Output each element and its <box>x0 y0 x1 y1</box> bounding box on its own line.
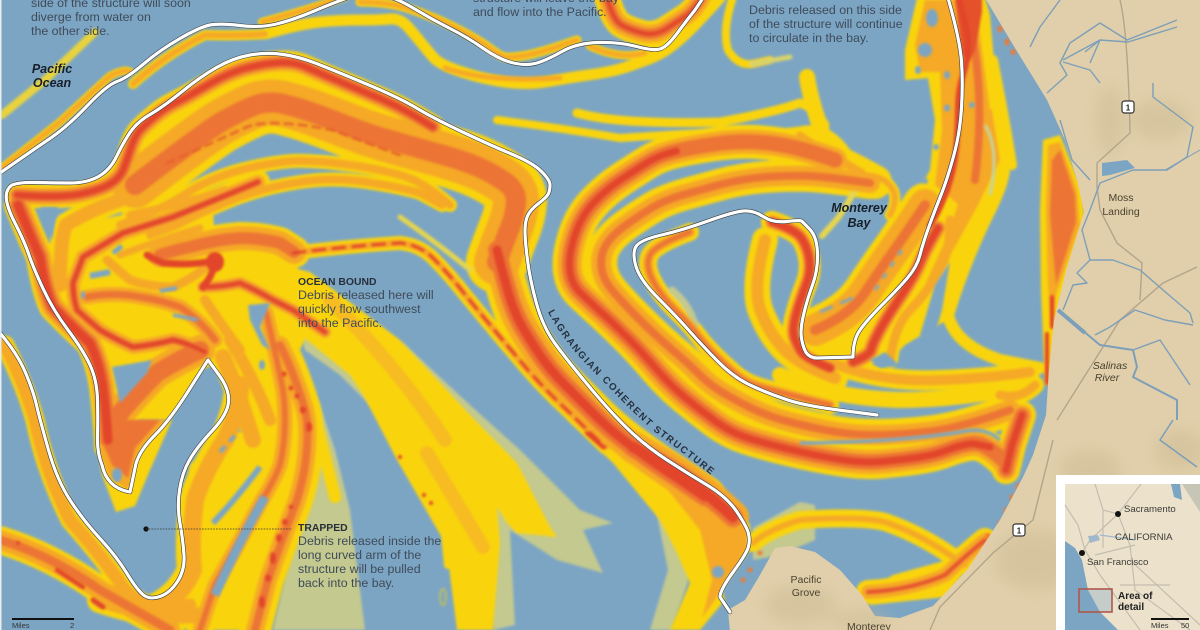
route 1 shield north: 1 <box>1126 104 1131 112</box>
callout: ocean bound: quickly flow southwest <box>298 302 421 316</box>
left image edge <box>0 0 2 630</box>
rivers and lake <box>1030 0 1200 467</box>
label: Pacific Ocean: Pacific <box>32 62 72 76</box>
label: Pacific Grove: Pacific <box>791 574 821 586</box>
label: Salinas River: River <box>1095 372 1120 384</box>
label: Moss Landing: Landing <box>1102 206 1140 218</box>
inset labels: Area of <box>1118 591 1153 602</box>
fan, hub and bay fill shapes <box>270 262 557 630</box>
inset ocean <box>1065 541 1118 630</box>
label: Monterey Bay: Bay <box>848 216 872 230</box>
inset labels: Sacramento <box>1124 504 1176 515</box>
text: top right note: to circulate in the bay. <box>749 31 869 45</box>
callout: trapped <box>143 523 441 590</box>
text: top right note: of the structure will continue <box>749 17 903 31</box>
coastline land mass <box>728 0 1200 630</box>
callout: ocean bound: into the Pacific. <box>298 316 382 330</box>
inset labels: CALIFORNIA <box>1115 532 1173 543</box>
inset scale bar: 50 <box>1181 621 1189 630</box>
inset city dots <box>1115 511 1121 517</box>
callout: trapped: structure will be pulled <box>298 562 421 576</box>
scale bar: main map: Miles <box>12 621 30 630</box>
hill shading <box>765 86 1200 630</box>
label: Pacific Ocean: Ocean <box>33 76 71 90</box>
scale bar: main map <box>12 618 74 630</box>
structure line: main long arm <box>0 53 749 612</box>
blue gaps within the bands <box>40 9 1000 595</box>
callout: trapped: back into the bay. <box>298 576 394 590</box>
text: top right note: Debris released on this side <box>749 3 902 17</box>
text: top center note: and flow into the Pacific. <box>473 5 607 19</box>
scale bar: main map: 2 <box>70 621 74 630</box>
inset scale bar <box>1151 618 1189 630</box>
route 1 shield north <box>1122 101 1134 113</box>
structure line: top <box>0 0 703 173</box>
text: top left note: the other side. <box>31 24 110 38</box>
text: top left note: diverge from water on <box>31 10 151 24</box>
callout: ocean bound: Debris released here will <box>298 288 434 302</box>
inset scale bar: Miles <box>1151 621 1169 630</box>
callout: trapped: Debris released inside the <box>298 534 441 548</box>
roads <box>930 0 1197 630</box>
callout: trapped: long curved arm of the <box>298 548 421 562</box>
label: Monterey Bay: Monterey <box>831 201 888 215</box>
area of detail box <box>1079 589 1112 612</box>
Lagrangian coherent structure lines <box>0 0 962 612</box>
route 1 shield south: 1 <box>1017 526 1022 536</box>
structure line: Monterey Bay <box>634 0 962 415</box>
pale fringe of fan <box>273 330 815 630</box>
inset labels: San Francisco <box>1087 557 1148 568</box>
panel: California locator inset <box>1056 475 1200 630</box>
route 1 shield south <box>1013 524 1025 536</box>
panel: land <box>728 0 1200 630</box>
label: Pacific Grove: Grove <box>792 587 820 599</box>
inset labels <box>1087 504 1176 613</box>
inset labels: detail <box>1118 602 1144 613</box>
callout: ocean bound: OCEAN BOUND <box>298 277 377 288</box>
callout: ocean bound <box>298 277 434 330</box>
inset roads <box>1065 484 1200 630</box>
label: Moss Landing: Moss <box>1108 192 1134 204</box>
callout: trapped: TRAPPED <box>298 523 348 534</box>
label: Salinas River: Salinas <box>1093 360 1128 372</box>
label: Lagrangian Coherent Structure: LAGRANGIAN COHERENT STRUCTURE <box>548 309 714 474</box>
